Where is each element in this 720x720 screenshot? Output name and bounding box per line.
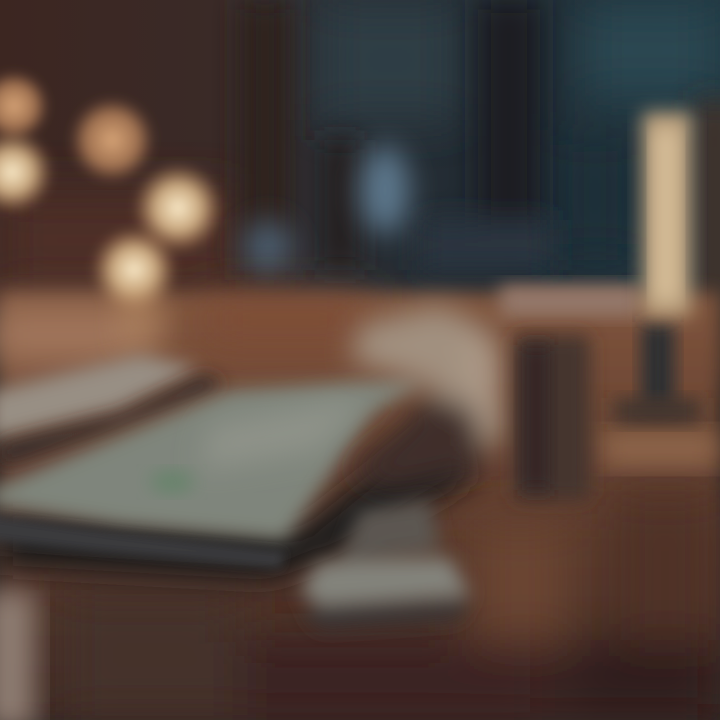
left paper <box>0 355 200 440</box>
main document <box>0 378 430 568</box>
table surface <box>0 285 720 720</box>
cup <box>514 335 590 500</box>
wall background <box>0 0 720 380</box>
lights: bokeh circles <box>0 70 224 350</box>
paper stack shadow <box>0 410 470 580</box>
small papers foreground <box>300 500 470 630</box>
crumpled cloth <box>350 305 505 490</box>
table lamp <box>615 112 700 424</box>
blue glows on wall <box>242 146 409 276</box>
